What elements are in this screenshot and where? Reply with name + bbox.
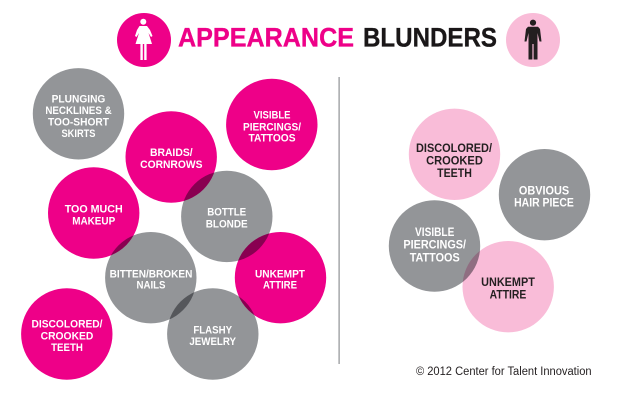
circle: bottle blonde bbox=[181, 171, 272, 262]
label: flashy jewelry: FLASHY bbox=[193, 324, 233, 336]
label: discolored teeth: DISCOLORED/ bbox=[32, 318, 102, 330]
panel: women's blunders bbox=[21, 68, 326, 380]
label: visible piercings: PIERCINGS/ bbox=[243, 121, 301, 133]
label: discolored teeth: CROOKED bbox=[41, 330, 93, 342]
label: obvious hair piece bbox=[514, 183, 574, 210]
circle: visible piercings bbox=[389, 200, 480, 292]
circle: braids bbox=[126, 111, 217, 203]
label: plunging necklines bbox=[45, 94, 112, 140]
label: visible piercings: VISIBLE bbox=[254, 110, 291, 122]
label: discolored teeth: TEETH bbox=[437, 166, 472, 180]
label: discolored teeth bbox=[32, 318, 102, 354]
label: visible piercings bbox=[403, 225, 467, 264]
circle: bitten nails bbox=[105, 232, 196, 323]
circle: unkempt attire bbox=[462, 241, 554, 332]
label: unkempt attire: UNKEMPT bbox=[255, 268, 305, 280]
circle: visible piercings bbox=[226, 79, 318, 170]
label: unkempt attire: UNKEMPT bbox=[481, 275, 535, 289]
label: flashy jewelry: JEWELRY bbox=[189, 336, 237, 348]
label: bottle blonde: BOTTLE bbox=[207, 207, 247, 219]
label: braids bbox=[140, 147, 203, 171]
label: too much makeup: MAKEUP bbox=[72, 216, 116, 228]
icon: man bbox=[506, 13, 560, 67]
title: BLUNDERS bbox=[363, 23, 497, 53]
panel: men's blunders bbox=[389, 109, 590, 332]
header bbox=[117, 13, 560, 67]
label: discolored teeth: DISCOLORED/ bbox=[416, 141, 493, 155]
label: too much makeup: TOO MUCH bbox=[65, 204, 123, 216]
label: visible piercings: PIERCINGS/ bbox=[403, 237, 467, 251]
circle: too much makeup bbox=[48, 167, 139, 259]
circle: discolored teeth bbox=[21, 288, 112, 380]
label: bitten nails: NAILS bbox=[136, 280, 166, 292]
label: flashy jewelry bbox=[189, 324, 237, 348]
divider bbox=[338, 77, 340, 364]
label: plunging necklines: SKIRTS bbox=[62, 128, 96, 140]
label: unkempt attire bbox=[255, 268, 305, 292]
label: braids: CORNROWS bbox=[140, 159, 203, 171]
label: unkempt attire: ATTIRE bbox=[490, 287, 526, 301]
label: bottle blonde bbox=[206, 207, 248, 231]
label: visible piercings bbox=[243, 110, 301, 145]
label: unkempt attire bbox=[481, 275, 535, 301]
label: plunging necklines: PLUNGING bbox=[52, 94, 106, 106]
label: visible piercings: TATTOOS bbox=[410, 250, 460, 264]
label: unkempt attire: ATTIRE bbox=[263, 280, 297, 292]
circle: flashy jewelry bbox=[167, 288, 258, 380]
label: discolored teeth: TEETH bbox=[51, 342, 83, 354]
title: APPEARANCE bbox=[178, 23, 354, 53]
label: visible piercings: VISIBLE bbox=[415, 225, 454, 239]
label: braids: BRAIDS/ bbox=[150, 147, 193, 159]
label: plunging necklines: TOO-SHORT bbox=[48, 116, 109, 128]
circle: plunging necklines bbox=[33, 68, 124, 160]
circle: obvious hair piece bbox=[499, 149, 590, 240]
label: plunging necklines: NECKLINES & bbox=[45, 105, 112, 117]
label: bottle blonde: BLONDE bbox=[206, 219, 248, 231]
circle: unkempt attire bbox=[235, 232, 326, 323]
label: obvious hair piece: OBVIOUS bbox=[519, 183, 569, 197]
label: obvious hair piece: HAIR PIECE bbox=[514, 196, 574, 210]
copyright: © 2012 Center for Talent Innovation bbox=[416, 366, 592, 378]
label: too much makeup bbox=[65, 204, 123, 228]
label: visible piercings: TATTOOS bbox=[248, 133, 296, 145]
label: discolored teeth bbox=[416, 141, 493, 180]
label: discolored teeth: CROOKED bbox=[426, 153, 483, 167]
title bbox=[178, 23, 497, 53]
label: bitten nails: BITTEN/BROKEN bbox=[110, 268, 192, 280]
icon: woman bbox=[117, 13, 171, 67]
label: bitten nails bbox=[110, 268, 192, 292]
circle: discolored teeth bbox=[409, 109, 500, 200]
